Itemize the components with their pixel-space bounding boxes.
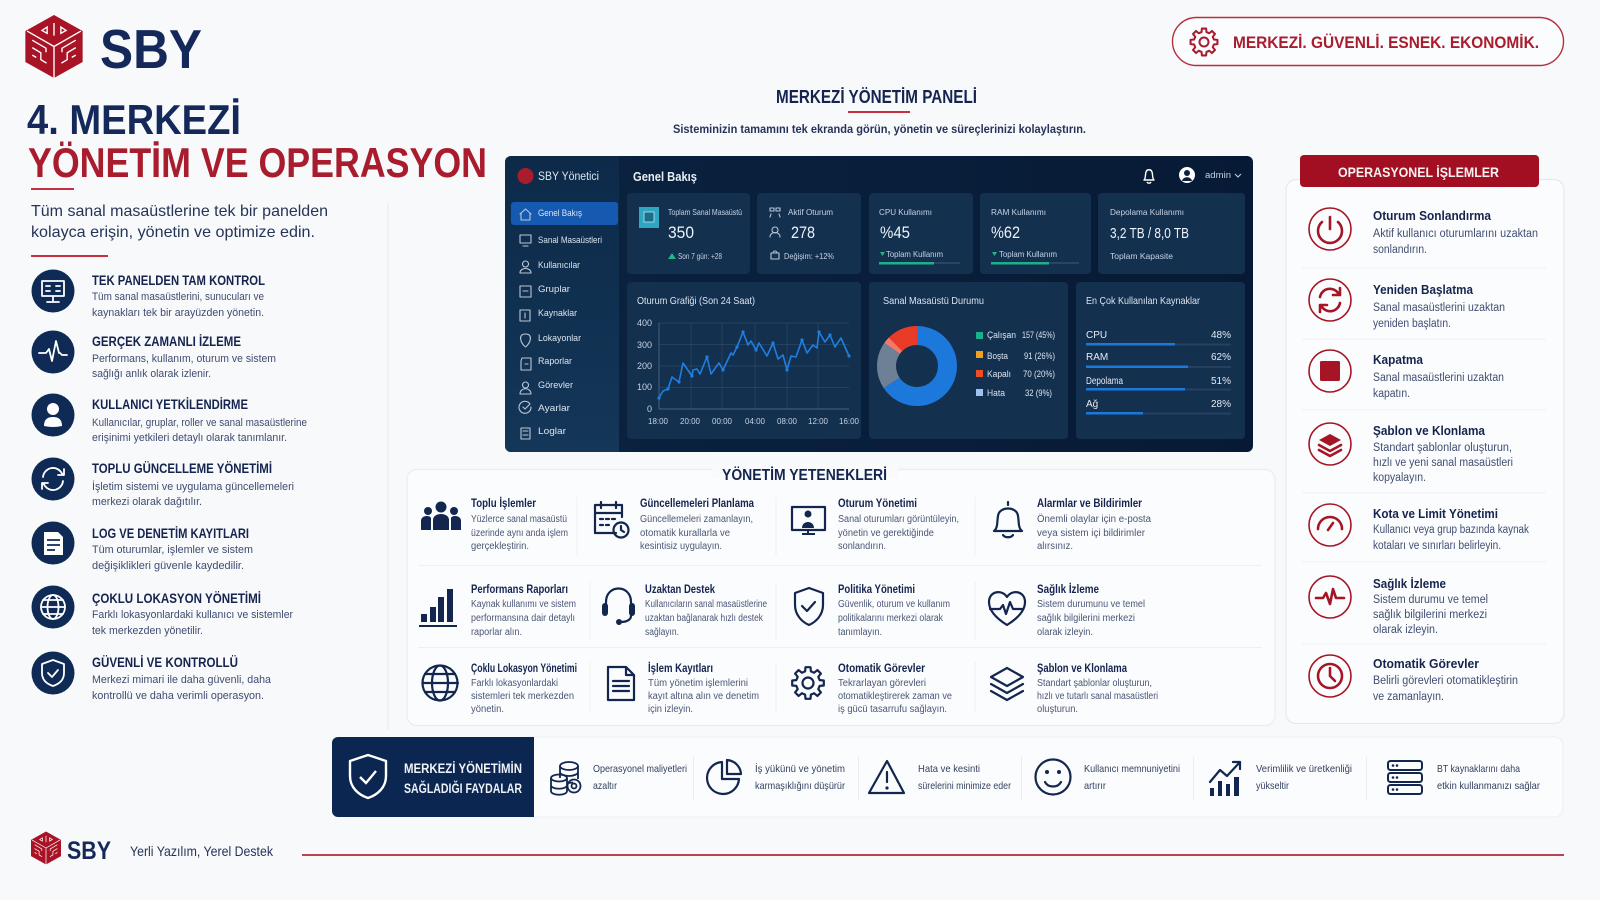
stat card: ram kullanımı: Toplam Kullanım (999, 249, 1057, 259)
benefit: hata ve kesinti: sürelerini minimize eder (918, 780, 1011, 792)
capability: şablon ve klonlama (991, 663, 1158, 715)
title: 4. MERKEZİ (27, 96, 241, 143)
operation: sağlık izleme: Sağlık İzleme (1373, 576, 1446, 591)
operation: oturum sonlandırma: Oturum Sonlandırma (1373, 208, 1492, 223)
line chart: oturum grafiği: 08:00 (777, 416, 797, 426)
capability: şablon ve klonlama: Şablon ve Klonlama (1037, 663, 1127, 675)
stat card: depolama kullanımı (1098, 193, 1245, 274)
operation: otomatik görevler: Belirli görevleri otomatikleştirin (1373, 675, 1518, 687)
stat card: aktif oturum: 278 (791, 223, 815, 242)
item: gerçek zamanlı izleme: GERÇEK ZAMANLI İZLEME (92, 334, 241, 349)
dashboard sidebar: Ayarlar (538, 403, 570, 414)
benefit: bt kaynakları: etkin kullanmanızı sağlar (1437, 780, 1540, 792)
line chart: oturum grafiği: 12:00 (808, 416, 828, 426)
dashboard sidebar: Genel Bakış (538, 208, 582, 219)
stat card: cpu kullanımı: %45 (880, 223, 910, 242)
operation: yeniden başlatma: Yeniden Başlatma (1373, 282, 1474, 297)
item: çoklu lokasyon yönetimi (32, 586, 293, 637)
item: gerçek zamanlı izleme (32, 330, 276, 380)
capability: sağlık izleme: Sağlık İzleme (1037, 583, 1099, 596)
dashboard sidebar: SBY Yönetici (538, 171, 599, 183)
donut chart: sanal masaüstü durumu: Hata (987, 388, 1005, 398)
line chart: oturum grafiği: 04:00 (745, 416, 765, 426)
operation: sağlık izleme: Sistem durumu ve temel (1373, 594, 1488, 606)
item: güvenli ve kontrollü: Merkezi mimari ile daha güvenli, daha (92, 674, 272, 686)
item: tek panelden tam kontrol: TEK PANELDEN TAM KONTROL (92, 273, 265, 288)
donut chart: sanal masaüstü durumu (869, 282, 1068, 439)
capability: otomatik görevler (792, 663, 952, 715)
capability: güncellemeleri planlama: kesintisiz uygulayın. (640, 541, 722, 552)
benefit: bt kaynakları (1388, 761, 1540, 794)
operation: otomatik görevler: ve zamanlayın. (1373, 691, 1444, 703)
panel: dashboard (505, 156, 1253, 452)
logo: SBY header: SBY (100, 18, 202, 80)
item: kullanıcı yetkilendirme: KULLANICI YETKİLENDİRME (92, 397, 248, 412)
capability: oturum yönetimi: sonlandırın. (838, 541, 886, 552)
line chart: oturum grafiği (627, 282, 861, 439)
capability: otomatik görevler: otomatikleştirerek zaman ve (838, 691, 952, 702)
capability: toplu işlemler: Toplu İşlemler (471, 497, 536, 510)
dashboard sidebar (505, 156, 619, 452)
line chart: oturum grafiği: 200 (637, 361, 652, 371)
operation: kapatma: Kapatma (1373, 352, 1424, 367)
benefit: hata ve kesinti: Hata ve kesinti (918, 763, 980, 775)
benefit: operasyonel maliyetler: azaltır (593, 780, 617, 792)
benefit: verimlilik: Verimlilik ve üretkenliği (1256, 763, 1352, 775)
capability: toplu işlemler (421, 497, 568, 552)
benefits heading (332, 737, 534, 817)
item: güvenli ve kontrollü: GÜVENLİ VE KONTROLLÜ (92, 655, 238, 670)
capability: sağlık izleme: olarak izleyin. (1037, 627, 1093, 638)
capability: oturum yönetimi: Oturum Yönetimi (838, 498, 917, 510)
capability: çoklu lokasyon yönetimi: sistemleri tek merkezden (471, 691, 574, 702)
heading: merkezi yönetim paneli (673, 87, 1086, 136)
capability: uzaktan destek: Kullanıcıların sanal masaüstlerine (645, 599, 767, 610)
stat card: toplam sanal masaüstü: Son 7 gün: +28 (678, 251, 722, 261)
operation: kota ve limit yönetimi: Kullanıcı veya grup bazında kaynak (1373, 524, 1529, 536)
item: tek panelden tam kontrol (32, 270, 265, 319)
capability: uzaktan destek: uzaktan bağlanarak hızlı destek (645, 613, 764, 624)
capability: performans raporları: Kaynak kullanımı ve sistem (471, 599, 576, 610)
capability: güncellemeleri planlama: otomatik kurallarla ve (640, 528, 730, 539)
capability: alarmlar ve bildirimler: Önemli olaylar için e-posta (1037, 513, 1151, 525)
line chart: oturum grafiği: 0 (647, 404, 652, 414)
stat card: cpu kullanımı (869, 193, 973, 274)
item: log ve denetim kayıtları: LOG VE DENETİM KAYITLARI (92, 526, 249, 541)
capability: sağlık izleme: sağlık bilgilerini merkezi (1037, 613, 1135, 624)
item: çoklu lokasyon yönetimi: Farklı lokasyonlardaki kullanıcı ve sistemler (92, 609, 293, 621)
dashboard sidebar: Kullanıcılar (538, 260, 580, 271)
operation: kapatma: Sanal masaüstlerini uzaktan (1373, 372, 1504, 384)
benefit: hata ve kesinti (869, 761, 1011, 793)
capability: politika yönetimi: Politika Yönetimi (838, 584, 915, 596)
capability: politika yönetimi: tanımlayın. (838, 627, 882, 638)
line chart: oturum grafiği: 18:00 (648, 416, 668, 426)
item: kullanıcı yetkilendirme (32, 394, 307, 444)
capability: toplu işlemler: üzerinde aynı anda işlem (471, 528, 568, 539)
line chart: oturum grafiği: 00:00 (712, 416, 732, 426)
line chart: oturum grafiği: 16:00 (839, 416, 859, 426)
panel: faydalar (332, 737, 1563, 817)
capability: alarmlar ve bildirimler: Alarmlar ve Bildirimler (1037, 498, 1142, 510)
capability: sağlık izleme (989, 583, 1145, 638)
footer: Yerli Yazılım, Yerel Destek (130, 843, 274, 859)
capability: çoklu lokasyon yönetimi: yönetin. (471, 704, 504, 715)
capability: işlem kayıtları: İşlem Kayıtları (648, 662, 713, 675)
bar chart: en çok kullanılan kaynaklar: Ağ (1086, 399, 1098, 410)
dashboard sidebar: Raporlar (538, 356, 572, 367)
item: toplu güncelleme yönetimi: TOPLU GÜNCELLEME YÖNETİMİ (92, 461, 272, 476)
benefits heading: SAĞLADIĞI FAYDALAR (404, 781, 522, 796)
capability: çoklu lokasyon yönetimi: Çoklu Lokasyon Yönetimi (471, 663, 577, 675)
bar chart: en çok kullanılan kaynaklar: 28% (1211, 399, 1231, 410)
dashboard sidebar: Lokayonlar (538, 333, 581, 344)
item: güvenli ve kontrollü: kontrollü ve daha verimli operasyon. (92, 690, 264, 702)
capability: oturum yönetimi (792, 498, 959, 552)
item: log ve denetim kayıtları: Tüm oturumlar, işlemler ve sistem (92, 544, 253, 556)
stat card: depolama kullanımı: 3,2 TB / 8,0 TB (1110, 226, 1189, 242)
benefit: kullanıcı memnuniyeti: artırır (1084, 780, 1106, 792)
operation: şablon ve klonlama: Standart şablonlar oluşturun, (1373, 442, 1512, 454)
benefit: kullanıcı memnuniyeti: Kullanıcı memnuniyetini (1084, 763, 1180, 775)
capability: toplu işlemler: gerçekleştirin. (471, 541, 529, 552)
operation: kota ve limit yönetimi: Kota ve Limit Yönetimi (1373, 506, 1498, 521)
donut chart: sanal masaüstü durumu: 70 (20%) (1023, 369, 1055, 379)
operation: kota ve limit yönetimi (1309, 504, 1529, 552)
item: tek panelden tam kontrol: kaynakları tek bir arayüzden yönetin. (92, 307, 264, 319)
capability: şablon ve klonlama: hızlı ve tutarlı sanal masaüstleri (1037, 691, 1158, 702)
operation: oturum sonlandırma: Aktif kullanıcı oturumlarını uzaktan (1373, 228, 1538, 240)
footer (31, 832, 1564, 865)
line chart: oturum grafiği: 300 (637, 340, 652, 350)
badge: slogan (1172, 18, 1564, 66)
benefit: verimlilik (1210, 762, 1352, 796)
capability: uzaktan destek: sağlayın. (645, 627, 679, 638)
heading: yönetim yetenekleri: YÖNETİM YETENEKLERİ (722, 465, 887, 484)
stat card: ram kullanımı: %62 (991, 223, 1020, 242)
donut chart: sanal masaüstü durumu: Boşta (987, 351, 1008, 361)
stat card: depolama kullanımı: Depolama Kullanımı (1110, 207, 1184, 217)
item: tek panelden tam kontrol: Tüm sanal masaüstlerini, sunucuları ve (92, 291, 264, 303)
bar chart: en çok kullanılan kaynaklar: 48% (1211, 330, 1231, 341)
capability: sağlık izleme: Sistem durumunu ve temel (1037, 599, 1145, 610)
dashboard top bar: admin (1205, 170, 1231, 180)
benefit: operasyonel maliyetler (551, 762, 687, 795)
stat card: cpu kullanımı: Toplam Kullanım (886, 249, 943, 259)
benefit: kullanıcı memnuniyeti (1036, 760, 1180, 794)
donut chart: sanal masaüstü durumu: 91 (26%) (1024, 351, 1055, 361)
intro text (31, 203, 328, 257)
panel: operasyonel işlemler (1286, 155, 1564, 724)
dashboard top bar (633, 167, 1241, 184)
stat card: depolama kullanımı: Toplam Kapasite (1110, 251, 1173, 261)
item: çoklu lokasyon yönetimi: ÇOKLU LOKASYON YÖNETİMİ (92, 591, 261, 606)
capability: güncellemeleri planlama (595, 498, 754, 552)
capability: otomatik görevler: iş gücü tasarrufu sağlayın. (838, 704, 947, 715)
operation: yeniden başlatma: yeniden başlatın. (1373, 318, 1451, 330)
stat card: cpu kullanımı: CPU Kullanımı (879, 207, 932, 217)
benefit: operasyonel maliyetler: Operasyonel maliyetleri (593, 763, 687, 775)
capability: çoklu lokasyon yönetimi: Farklı lokasyonlardaki (471, 678, 558, 689)
header: operasyonel işlemler: OPERASYONEL İŞLEMLER (1338, 164, 1499, 180)
item: log ve denetim kayıtları: değişiklikleri güvenle kaydedilir. (92, 560, 244, 572)
item: kullanıcı yetkilendirme: erişinimi yetkileri detaylı olarak tanımlanır. (92, 432, 287, 444)
heading: merkezi yönetim paneli: MERKEZİ YÖNETİM PANELİ (776, 87, 977, 107)
item: gerçek zamanlı izleme: sağlığı anlık olarak izlenir. (92, 368, 211, 380)
bar chart: en çok kullanılan kaynaklar: En Çok Kullanılan Kaynaklar (1086, 295, 1200, 307)
bar chart: en çok kullanılan kaynaklar: Depolama (1086, 376, 1123, 387)
operation: oturum sonlandırma: sonlandırın. (1373, 244, 1427, 256)
stat card: aktif oturum (757, 193, 861, 274)
item: çoklu lokasyon yönetimi: tek merkezden yönetilir. (92, 625, 203, 637)
stat card: aktif oturum: Değişim: +12% (784, 251, 834, 261)
bar chart: en çok kullanılan kaynaklar: 62% (1211, 352, 1231, 363)
bar chart: en çok kullanılan kaynaklar (1076, 282, 1245, 439)
line chart: oturum grafiği: 20:00 (680, 416, 700, 426)
capability: toplu işlemler: Yüzlerce sanal masaüstü (471, 514, 567, 525)
item: kullanıcı yetkilendirme: Kullanıcılar, gruplar, roller ve sanal masaüstlerine (92, 417, 307, 429)
operation: sağlık izleme: sağlık bilgilerini merkezi (1373, 609, 1487, 621)
operation: şablon ve klonlama: Şablon ve Klonlama (1373, 423, 1486, 438)
capability: oturum yönetimi: yönetin ve gerektiğinde (838, 528, 934, 539)
stat card: toplam sanal masaüstü: 350 (668, 223, 694, 242)
capability: işlem kayıtları (608, 662, 759, 715)
capability: uzaktan destek: Uzaktan Destek (645, 584, 715, 596)
benefit: iş yükü: karmaşıklığını düşürür (755, 780, 845, 792)
benefits heading: MERKEZİ YÖNETİMİN (404, 761, 522, 776)
operation: oturum sonlandırma (1309, 208, 1538, 256)
heading: merkezi yönetim paneli: Sisteminizin tamamını tek ekranda görün, yönetin ve süreçlerinizi kolaylaştırın. (673, 124, 1086, 136)
capability: politika yönetimi: Güvenlik, oturum ve kullanım (838, 599, 950, 610)
capability: alarmlar ve bildirimler (994, 498, 1151, 552)
panel: left feature list (32, 270, 307, 702)
item: toplu güncelleme yönetimi: İşletim sistemi ve uygulama güncellemeleri (92, 480, 294, 493)
item: toplu güncelleme yönetimi: merkezi olarak dağıtılır. (92, 496, 202, 508)
item: güvenli ve kontrollü (32, 652, 272, 702)
operation: şablon ve klonlama: kopyalayın. (1373, 472, 1426, 484)
title (27, 96, 487, 190)
benefit: iş yükü (707, 760, 845, 794)
capability: güncellemeleri planlama: Güncellemeleri zamanlayın, (640, 514, 753, 525)
donut chart: sanal masaüstü durumu: Kapalı (987, 369, 1011, 379)
bar chart: en çok kullanılan kaynaklar: 51% (1211, 376, 1231, 387)
capability: güncellemeleri planlama: Güncellemeleri Planlama (640, 498, 754, 510)
capability: çoklu lokasyon yönetimi (422, 663, 577, 715)
donut chart: sanal masaüstü durumu: Çalışan (987, 330, 1016, 340)
operation: kapatma (1309, 350, 1504, 400)
capability: şablon ve klonlama: Standart şablonlar oluşturun, (1037, 678, 1152, 689)
capability: otomatik görevler: Tekrarlayan görevleri (838, 678, 926, 689)
line chart: oturum grafiği: 400 (637, 318, 652, 328)
capability: performans raporları: raporlar alın. (471, 627, 522, 638)
operation: sağlık izleme (1309, 576, 1488, 636)
capability: performans raporları: performansına dair detaylı (471, 613, 575, 624)
item: gerçek zamanlı izleme: Performans, kullanım, oturum ve sistem (92, 353, 276, 365)
operation: şablon ve klonlama (1309, 423, 1513, 484)
operation: şablon ve klonlama: hızlı ve yeni sanal masaüstleri (1373, 457, 1513, 469)
footer: SBY (67, 837, 111, 865)
bar chart: en çok kullanılan kaynaklar: RAM (1086, 352, 1108, 363)
operation: kapatma: kapatın. (1373, 388, 1410, 400)
capability: şablon ve klonlama: oluşturun. (1037, 704, 1078, 715)
capability: politika yönetimi: politikalarını merkezi olarak (838, 613, 944, 624)
line chart: oturum grafiği: Oturum Grafiği (Son 24 Saat) (637, 295, 755, 307)
stat card: ram kullanımı (980, 193, 1091, 274)
intro text: Tüm sanal masaüstlerine tek bir panelden (31, 203, 328, 220)
operation: otomatik görevler: Otomatik Görevler (1373, 656, 1479, 671)
stat card: ram kullanımı: RAM Kullanımı (991, 207, 1046, 217)
stat card: toplam sanal masaüstü (627, 193, 750, 274)
item: toplu güncelleme yönetimi (32, 458, 294, 508)
capability: işlem kayıtları: için izleyin. (648, 704, 693, 715)
stat card: aktif oturum: Aktif Oturum (788, 207, 833, 217)
dashboard sidebar: Gruplar (538, 284, 570, 295)
capability: otomatik görevler: Otomatik Görevler (838, 663, 925, 675)
dashboard top bar: Genel Bakış (633, 169, 697, 184)
item: log ve denetim kayıtları (32, 522, 253, 572)
capability: alarmlar ve bildirimler: veya sistem içi bildirimler (1037, 528, 1146, 539)
benefit: iş yükü: İş yükünü ve yönetim (755, 762, 845, 775)
panel: yönetim yetenekleri (407, 462, 1275, 726)
line chart: oturum grafiği: 100 (637, 382, 652, 392)
operation: kota ve limit yönetimi: kotaları ve sınırları belirleyin. (1373, 540, 1501, 552)
benefit: verimlilik: yükseltir (1256, 780, 1289, 792)
benefit: bt kaynakları: BT kaynaklarını daha (1437, 763, 1520, 775)
capability: politika yönetimi (795, 584, 950, 638)
operation: otomatik görevler (1309, 655, 1518, 703)
dashboard sidebar: Görevler (538, 380, 573, 391)
stat card: toplam sanal masaüstü: Toplam Sanal Masaüstü (668, 207, 742, 217)
capability: alarmlar ve bildirimler: alırsınız. (1037, 541, 1073, 552)
dashboard sidebar: Kaynaklar (538, 308, 577, 319)
badge: slogan: MERKEZİ. GÜVENLİ. ESNEK. EKONOMİK. (1233, 33, 1539, 52)
operation: yeniden başlatma: Sanal masaüstlerini uzaktan (1373, 302, 1505, 314)
donut chart: sanal masaüstü durumu: 32 (9%) (1025, 388, 1052, 398)
capability: uzaktan destek (602, 584, 767, 638)
dashboard sidebar: Loglar (538, 426, 566, 437)
donut chart: sanal masaüstü durumu: Sanal Masaüstü Durumu (883, 295, 984, 307)
bar chart: en çok kullanılan kaynaklar: CPU (1086, 330, 1107, 341)
capability: işlem kayıtları: Tüm yönetim işlemlerini (648, 678, 748, 689)
header: operasyonel işlemler (1300, 155, 1539, 187)
operation: yeniden başlatma (1309, 279, 1505, 330)
capability: oturum yönetimi: Sanal oturumları görüntüleyin, (838, 514, 959, 525)
capability: performans raporları (419, 584, 576, 638)
title: YÖNETİM VE OPERASYON (28, 139, 487, 186)
operation: sağlık izleme: olarak izleyin. (1373, 624, 1438, 636)
intro text: kolayca erişin, yönetin ve optimize edin. (31, 224, 315, 241)
donut chart: sanal masaüstü durumu: 157 (45%) (1022, 330, 1055, 340)
logo: SBY header (25, 15, 202, 80)
capability: işlem kayıtları: kayıt altına alın ve denetim (648, 691, 759, 702)
dashboard sidebar: Sanal Masaüstleri (538, 235, 602, 246)
capability: performans raporları: Performans Raporları (471, 584, 568, 596)
